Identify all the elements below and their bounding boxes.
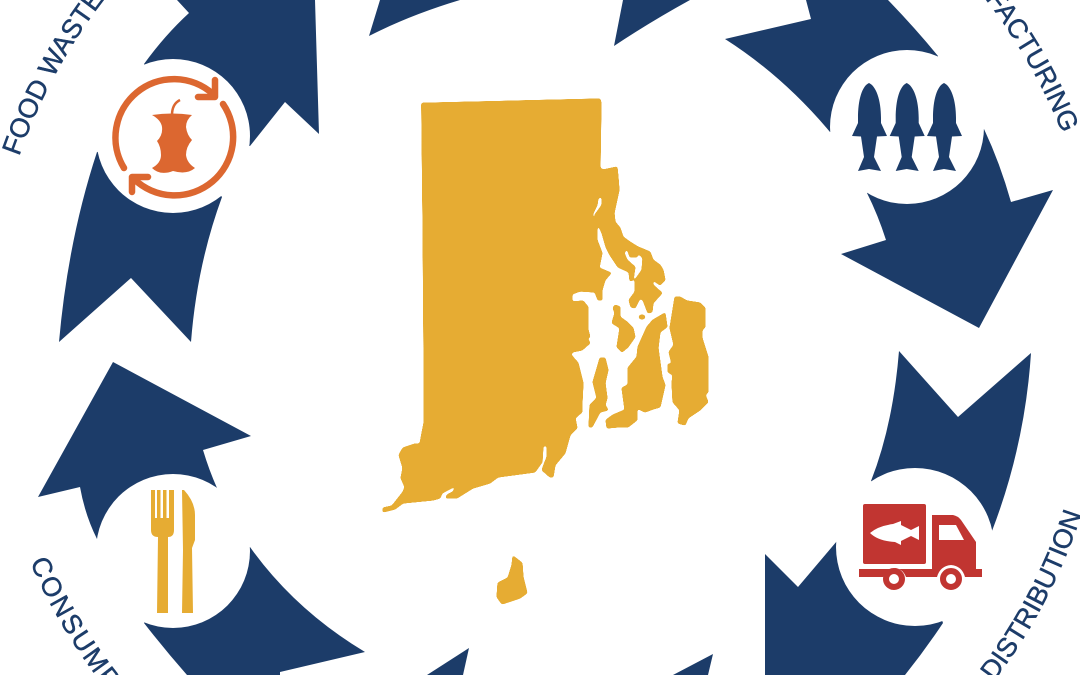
icon: three fish	[830, 50, 984, 204]
icon: apple core with recycling arrows	[96, 59, 250, 213]
map: Rhode Island	[383, 99, 708, 604]
icon: fork and knife	[96, 474, 250, 628]
icon: delivery truck with fish	[836, 468, 994, 626]
